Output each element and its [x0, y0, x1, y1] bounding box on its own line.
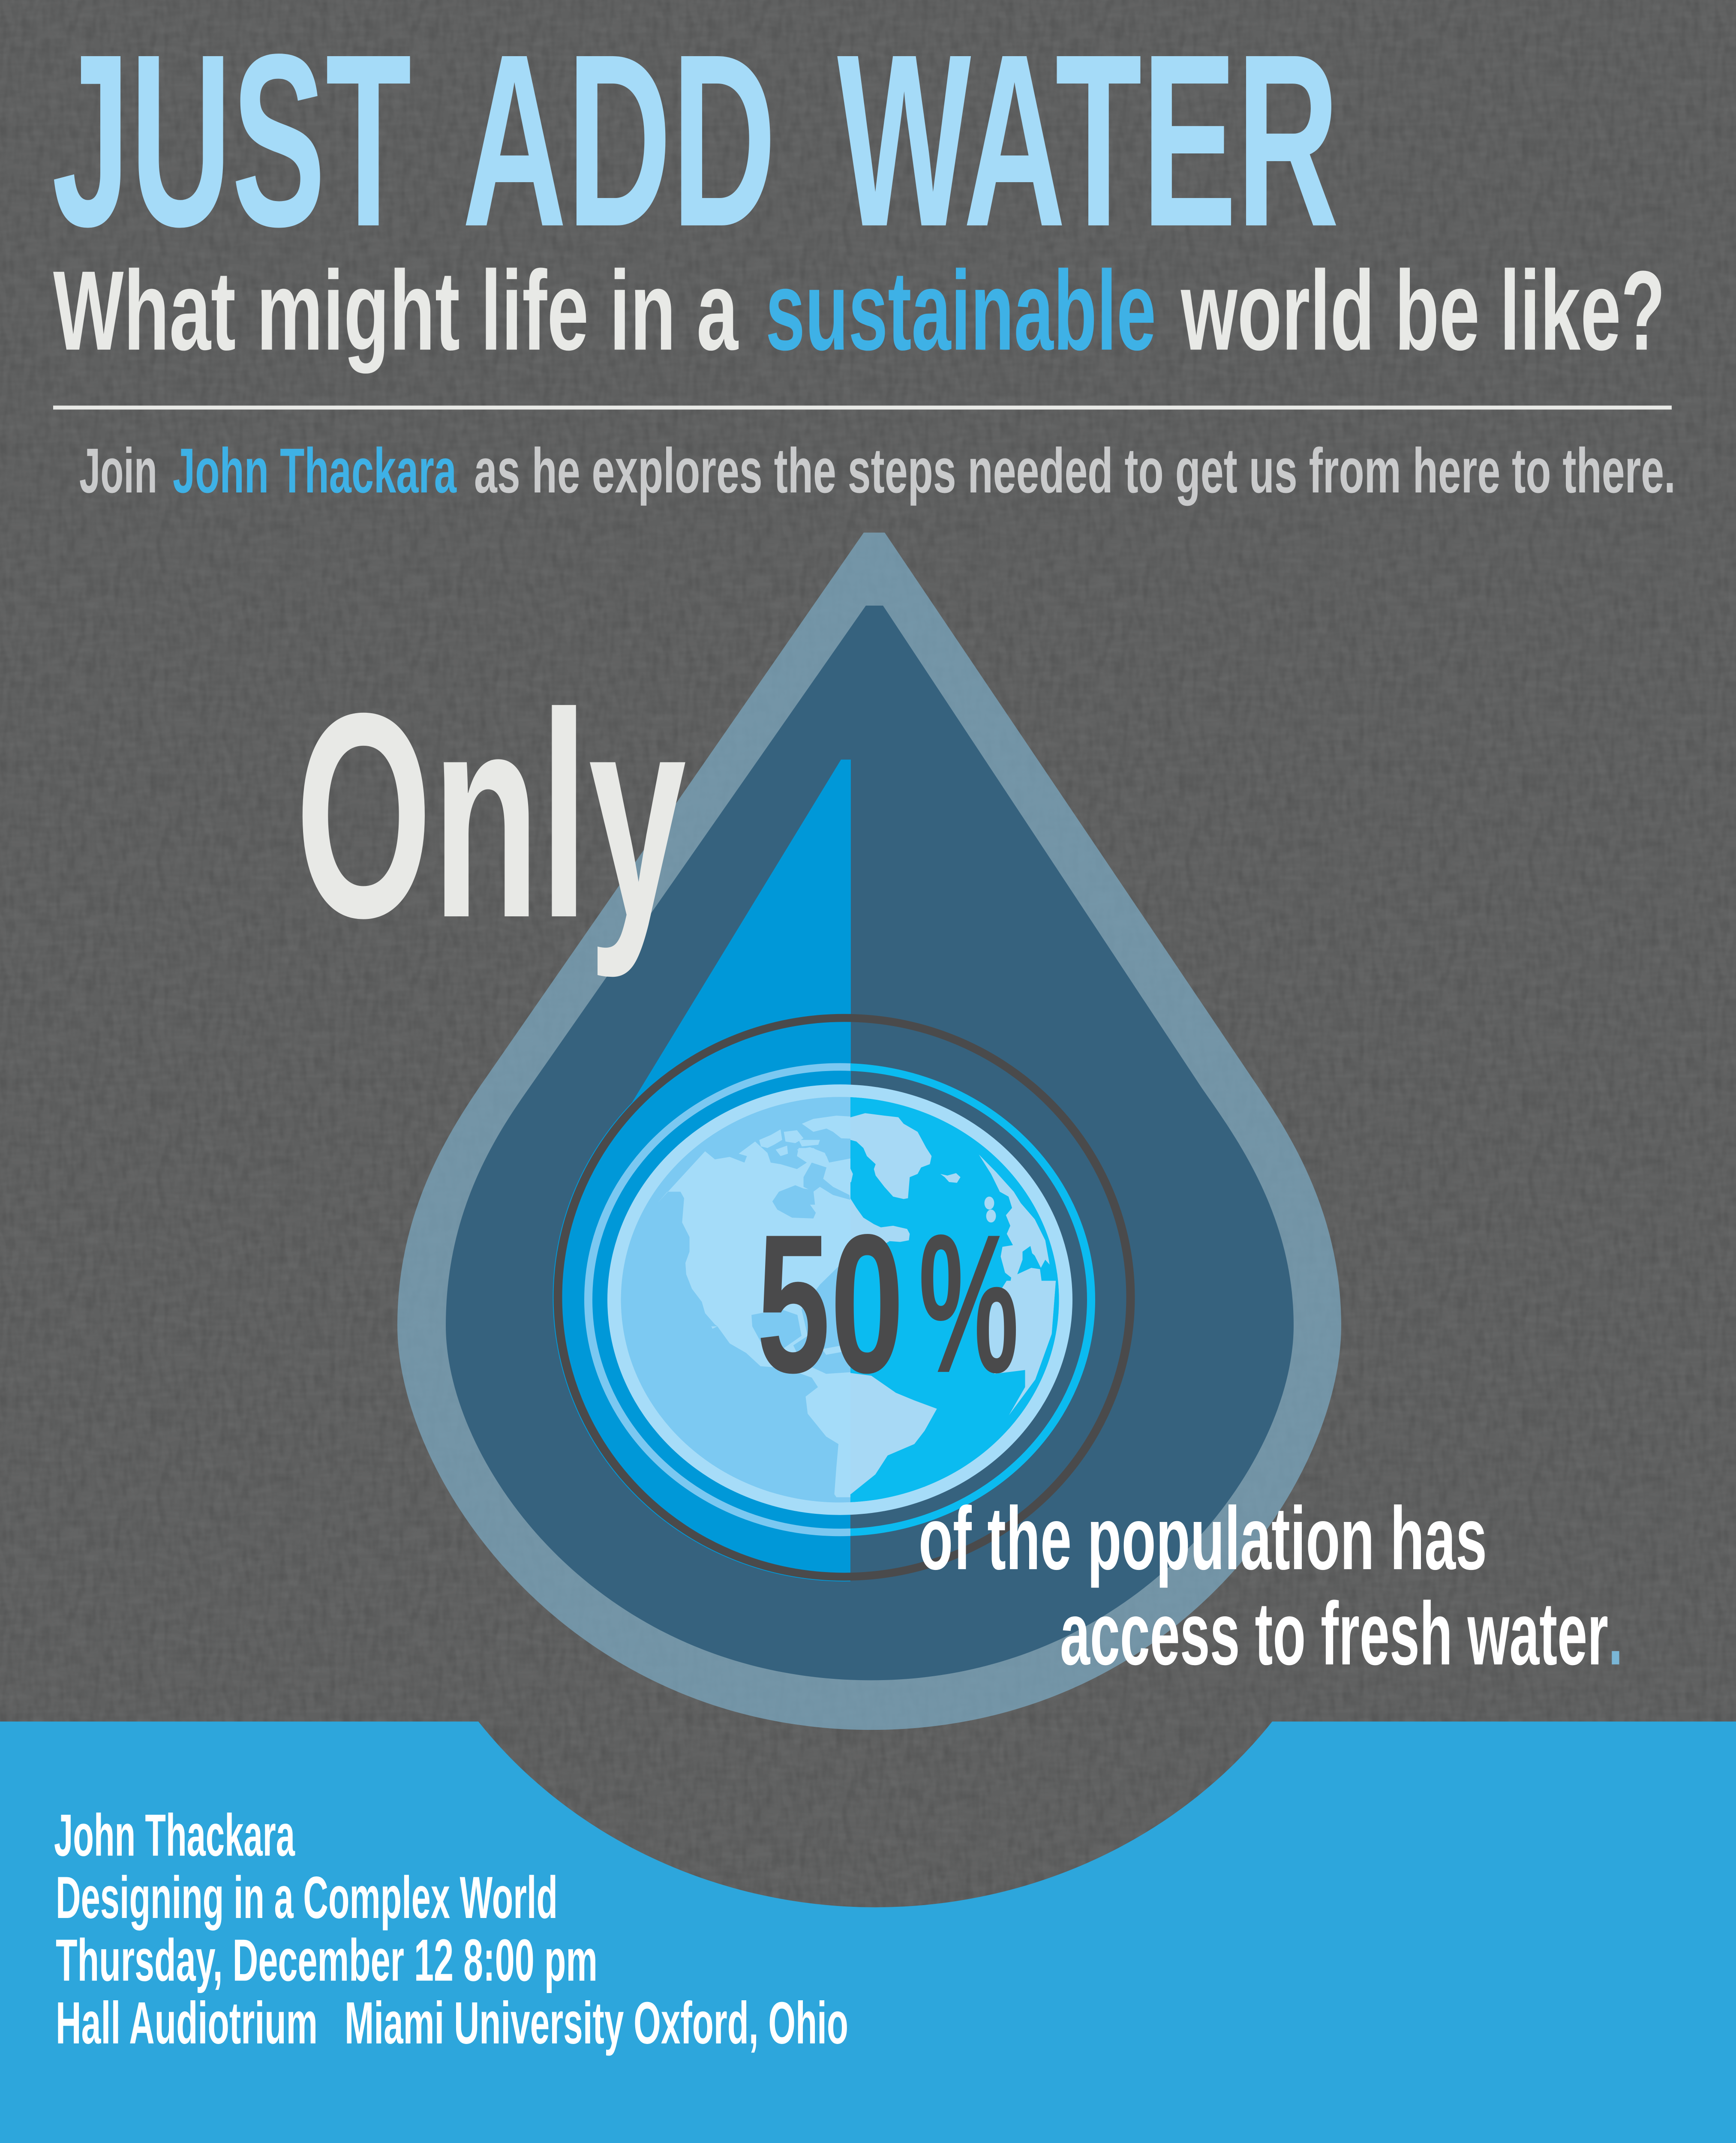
- water drop graphic: [397, 533, 1341, 1730]
- subtitle question: What might life in a: [53, 247, 739, 374]
- globe: South America right half: [843, 1372, 937, 1494]
- word: Only: Only: [295, 653, 688, 980]
- event details: [54, 1802, 848, 2056]
- event details: Hall Audiotrium: [56, 1990, 318, 2056]
- globe: Gulf of Mexico: [751, 1309, 802, 1353]
- drop: outer halo: [397, 533, 1341, 1730]
- divider rule: [53, 405, 1672, 410]
- footer water band with drop-shaped cut-out: [0, 1722, 1736, 2143]
- outer dark ring: [558, 1018, 1131, 1577]
- globe: right half: [621, 1097, 1089, 1503]
- globe: left Atlantic and Caribbean: [793, 1250, 855, 1374]
- stat: 50%: 50: [757, 1193, 904, 1414]
- half-filled water level wedge: [553, 759, 851, 1582]
- globe: left Pacific coast: [596, 1327, 855, 1524]
- event details: John Thackara: [54, 1802, 295, 1868]
- thin blue ring: [588, 1067, 1091, 1532]
- title: ADD: [462, 3, 776, 278]
- subtitle question: [53, 247, 1665, 374]
- globe: lower land, Central and South America: [711, 1327, 855, 1497]
- drop: inner body: [446, 606, 1294, 1680]
- subtitle question: sustainable: [766, 247, 1156, 374]
- event details: Thursday, December 12 8:00 pm: [56, 1927, 598, 1993]
- stat: 50%: %: [919, 1193, 1019, 1414]
- intro line: Join: [79, 435, 157, 506]
- caption: population has access to fresh water: .: [1608, 1584, 1623, 1684]
- caption: population has access to fresh water: [919, 1489, 1623, 1684]
- title: JUST: [52, 3, 411, 278]
- globe: left half: [596, 1097, 1059, 1524]
- event details: Miami University Oxford, Ohio: [345, 1990, 848, 2056]
- event details: Designing in a Complex World: [56, 1864, 558, 1931]
- title: [52, 3, 1339, 278]
- intro line: John Thackara: [173, 435, 457, 506]
- globe: [596, 1084, 1089, 1524]
